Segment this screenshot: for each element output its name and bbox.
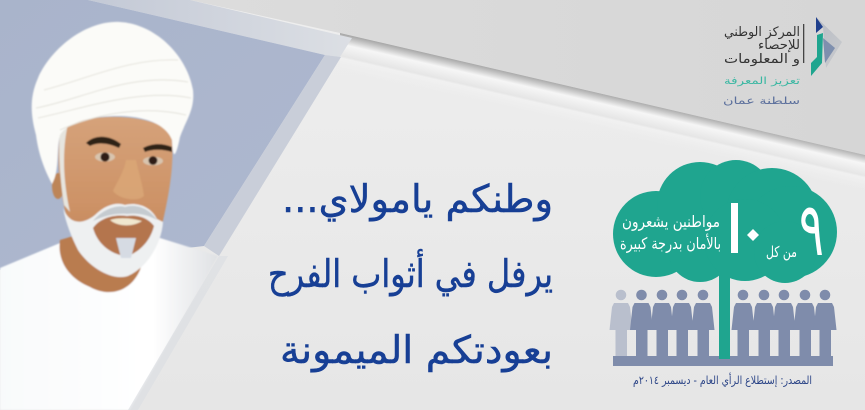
title line 1: وطنكم يامولاي... (282, 177, 553, 222)
citizens text: بالأمان بدرجة كبيرة (620, 233, 721, 254)
logo slogan: تعزيز المعرفة (724, 76, 800, 87)
goatee (116, 238, 136, 258)
title (268, 177, 553, 373)
portrait (0, 22, 218, 410)
logo country: سلطنة عمان (723, 96, 800, 107)
logo name: و المعلومات (724, 52, 800, 67)
people: one lighter, nine darker (610, 290, 836, 356)
neck (60, 225, 150, 292)
beard (63, 204, 163, 277)
moustache grey (93, 206, 157, 221)
logo name: المركز الوطني (724, 25, 800, 40)
teeth (110, 218, 142, 225)
title line 3: بعودتكم الميمونة (280, 328, 553, 373)
logo name: للإحصاء (758, 38, 800, 53)
panel: blue backdrop (0, 0, 325, 270)
panel: top grey band (190, 0, 865, 155)
eyes (95, 152, 163, 165)
tree trunk (719, 270, 730, 358)
source: المصدر: إستطلاع الرأي العام - ديسمبر ٢٠١٤م (633, 372, 812, 388)
logo name (724, 25, 800, 67)
face (58, 117, 173, 277)
robe (0, 238, 218, 410)
panel: shaded strip under grey band (340, 33, 865, 192)
tree chart: 9 of 10 citizens (610, 160, 837, 388)
base bar (613, 356, 833, 366)
big number 9: ٩ (799, 187, 824, 273)
eyebrows (86, 137, 121, 148)
logo mark (811, 17, 842, 76)
title line 2: يرفل في أثواب الفرح (268, 249, 553, 297)
logo divider (803, 24, 804, 63)
turban folds (36, 60, 191, 130)
citizens text: مواطنين يشعرون (622, 212, 720, 232)
tree crown (613, 160, 837, 283)
panel: diagonal strip (204, 55, 341, 256)
panel: light strip left of the band (88, 0, 352, 57)
label: of: من كل (766, 243, 797, 261)
nose (113, 160, 144, 199)
turban (32, 22, 193, 184)
panel: diagonal edge over robe (128, 256, 228, 410)
chin patch and mouth (93, 216, 154, 256)
logo (723, 17, 842, 107)
citizens text (620, 212, 721, 254)
hair at temple (59, 124, 70, 212)
big number 10 (731, 203, 759, 253)
trunk base (719, 356, 730, 359)
ear (52, 173, 64, 199)
